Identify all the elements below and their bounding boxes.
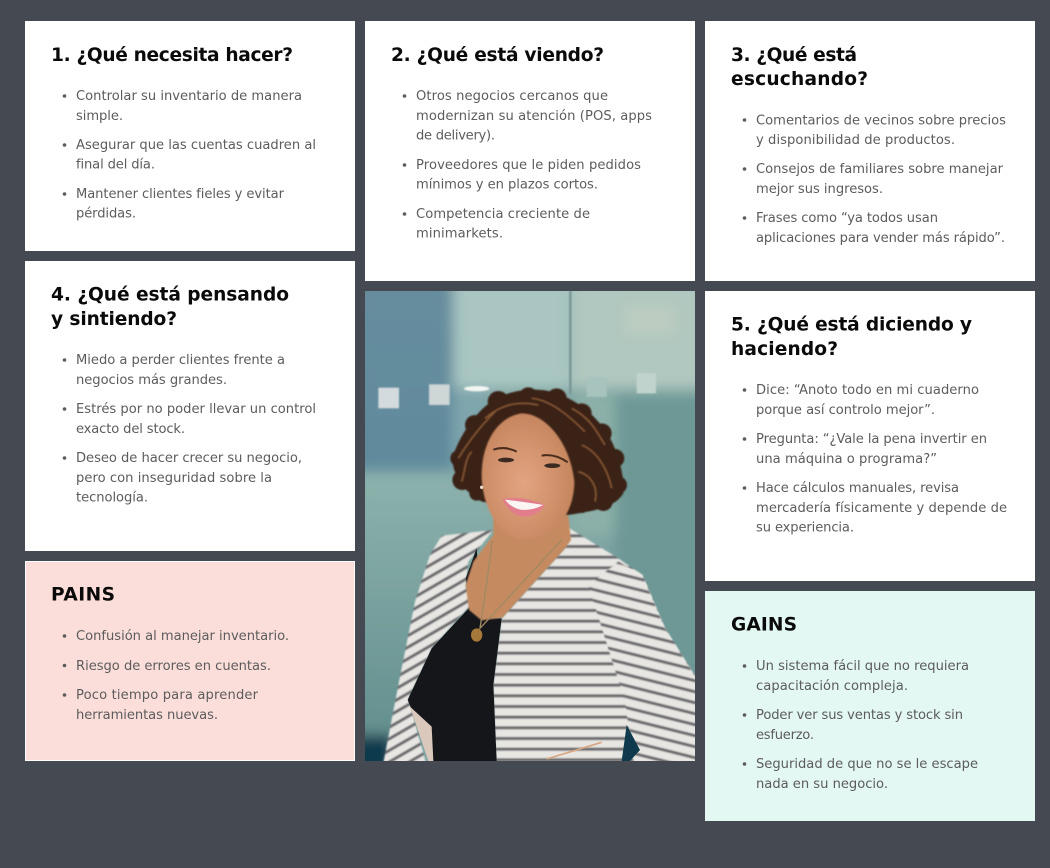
jacket sleeve [588, 562, 698, 772]
list: panel 1: simple. [76, 109, 123, 124]
heading: panel 3: escuchando? [731, 69, 868, 90]
list: panel 1: Mantener clientes fieles y evitar [76, 187, 285, 202]
list: panel 5 [743, 383, 1007, 535]
list: gains: Un sistema fácil que no requiera [756, 659, 969, 674]
list: panel 2: Otros negocios cercanos que [416, 89, 608, 104]
heading: gains: GAINS [731, 615, 797, 636]
hair [450, 387, 627, 515]
jacket left side [382, 530, 493, 772]
list: pains: herramientas nuevas. [76, 708, 218, 723]
heading: panel 3: 3. ¿Qué está [731, 45, 857, 66]
list: panel 2: Proveedores que le piden pedidos [416, 158, 641, 173]
jacket zipper [547, 742, 602, 759]
list: panel 3 [743, 113, 1006, 246]
panel: gains [705, 591, 1035, 821]
panel: 2. what they see [365, 21, 695, 281]
jacket right side [493, 528, 698, 772]
list: panel 2: minimarkets. [416, 226, 503, 241]
list: panel 5: porque así controlo mejor”. [756, 403, 935, 418]
panel: 1. what they need to do [25, 21, 355, 251]
list: panel 4: pero con inseguridad sobre la [76, 471, 272, 486]
face [482, 413, 574, 540]
dark gap under the arm [622, 725, 640, 761]
heading: panel 3 [731, 45, 868, 90]
list: panel 4: tecnología. [76, 490, 148, 505]
list: panel 1: Asegurar que las cuentas cuadren al [76, 138, 316, 153]
panel: 4. what they think and feel [25, 261, 355, 551]
list: panel 4: Deseo de hacer crecer su negocio, [76, 451, 302, 466]
frosted squares [378, 373, 656, 408]
list: panel 2: modernizan su atención (POS, apps [416, 109, 652, 124]
list: panel 4: exacto del stock. [76, 422, 185, 437]
list: pains: Poco tiempo para aprender [76, 688, 259, 703]
smile [503, 498, 545, 517]
list: panel 3: y disponibilidad de productos. [756, 133, 955, 148]
list: panel 2: Competencia creciente de [416, 207, 590, 222]
list: gains: esfuerzo. [756, 728, 814, 743]
list: panel 5: mercadería físicamente y depende de [756, 501, 1007, 516]
list: panel 4: negocios más grandes. [76, 373, 227, 388]
list: panel 5: Pregunta: “¿Vale la pena invertir en [756, 432, 987, 447]
list: panel 4: Estrés por no poder llevar un control [76, 402, 316, 417]
list: gains: capacitación compleja. [756, 679, 908, 694]
necklace and pendant [471, 540, 562, 642]
list: panel 3: mejor sus ingresos. [756, 182, 883, 197]
panel: pains [26, 562, 354, 760]
list: pains [63, 629, 289, 723]
list: panel 4: Miedo a perder clientes frente a [76, 353, 285, 368]
heading: panel 2: 2. ¿Qué está viendo? [391, 45, 604, 66]
heading: panel 4 [51, 285, 289, 330]
eyes and brows [493, 448, 568, 468]
list: panel 1: pérdidas. [76, 207, 136, 222]
list: panel 2 [403, 89, 652, 241]
chest and neck [466, 515, 571, 620]
list: panel 2: de delivery). [416, 128, 495, 143]
list: gains [743, 659, 978, 792]
list: panel 5: Dice: “Anoto todo en mi cuaderno [756, 383, 979, 398]
list: panel 2: mínimos y en plazos cortos. [416, 177, 598, 192]
list: panel 5: Hace cálculos manuales, revisa [756, 481, 959, 496]
list: panel 1: Controlar su inventario de manera [76, 89, 302, 104]
earring [480, 486, 483, 489]
list: pains: Confusión al manejar inventario. [76, 629, 289, 644]
heading: panel 5: 5. ¿Qué está diciendo y [731, 315, 972, 336]
heading: panel 1: 1. ¿Qué necesita hacer? [51, 45, 293, 66]
panel: 5. what they say and do [705, 291, 1035, 581]
list: panel 1 [63, 89, 316, 222]
list: panel 3: aplicaciones para vender más rápido”. [756, 231, 1005, 246]
list: panel 4 [63, 353, 316, 505]
heading: pains: PAINS [51, 585, 115, 606]
list: panel 5: su experiencia. [756, 520, 854, 535]
list: panel 3: Comentarios de vecinos sobre precios [756, 113, 1006, 128]
list: panel 3: Frases como “ya todos usan [756, 211, 938, 226]
glass door frame [569, 291, 572, 394]
blurred office background [365, 291, 695, 761]
list: panel 5: una máquina o programa?” [756, 452, 937, 467]
hair highlights [458, 398, 612, 502]
list: pains: Riesgo de errores en cuentas. [76, 659, 271, 674]
heading: panel 4: y sintiendo? [51, 309, 177, 330]
list: gains: nada en su negocio. [756, 777, 888, 792]
list: panel 3: Consejos de familiares sobre manejar [756, 162, 1004, 177]
heading: panel 4: 4. ¿Qué está pensando [51, 285, 289, 306]
photo: smiling woman with short curly hair and striped jacket [365, 291, 695, 761]
heading: panel 5 [731, 315, 972, 360]
list: gains: Seguridad de que no se le escape [756, 757, 978, 772]
list: gains: Poder ver sus ventas y stock sin [756, 708, 963, 723]
inner lining [410, 707, 433, 761]
black top [408, 548, 502, 761]
panel: 3. what they hear [705, 21, 1035, 281]
heading: panel 5: haciendo? [731, 339, 838, 360]
list: panel 1: final del día. [76, 158, 155, 173]
